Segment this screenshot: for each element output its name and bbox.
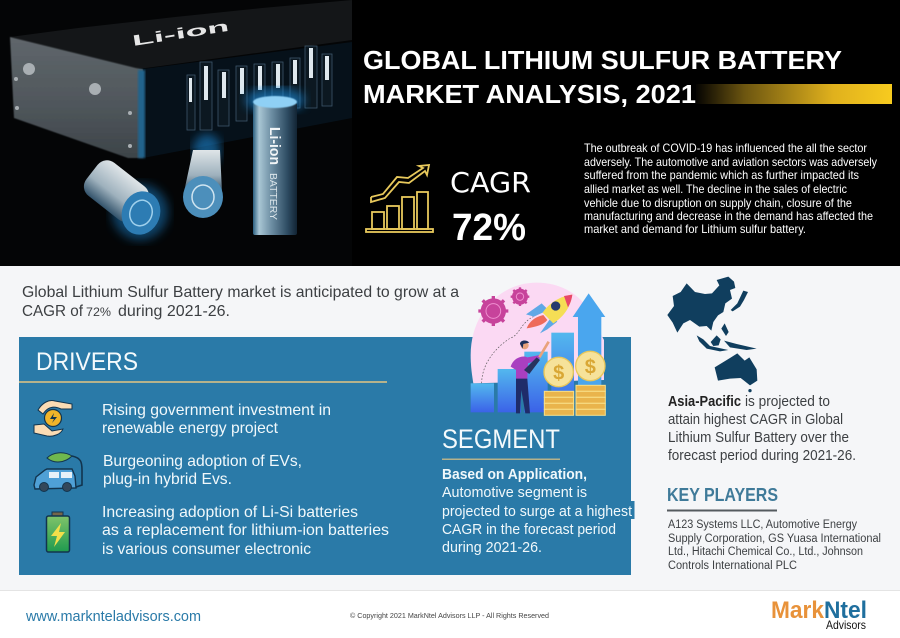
driver 3 text: as a replacement for lithium-ion batteries	[102, 522, 389, 539]
title: MARKET ANALYSIS, 2021	[363, 79, 696, 109]
CAGR value: 72%	[452, 207, 526, 249]
patch behind overflowing word	[630, 501, 634, 519]
bars	[471, 383, 494, 412]
gears	[478, 287, 529, 326]
pink backdrop	[471, 283, 604, 383]
battery pack top	[10, 0, 352, 68]
coins: $	[585, 356, 596, 378]
Asia-Pacific text: attain highest CAGR in Global	[668, 412, 843, 428]
intro text: 72%	[86, 305, 111, 319]
coins	[544, 351, 605, 387]
icon: growth chart	[366, 165, 433, 232]
title	[363, 45, 842, 109]
key players list: Controls International PLC	[668, 560, 797, 572]
key players underline	[667, 510, 777, 512]
terminal bolts	[14, 63, 132, 148]
key players list: A123 Systems LLC, Automotive Energy	[668, 519, 857, 531]
key players list: Ltd., Hitachi Chemical Co., Ltd., Johnson	[668, 546, 863, 558]
COVID-19 text block: vehicle due to disruption on supply chain, closure of the	[584, 196, 852, 210]
flight path	[482, 317, 533, 383]
intro text: during 2021-26.	[118, 303, 230, 320]
driver 1 text	[102, 402, 331, 437]
COVID-19 text block: manufacturing and decrease in the demand has affected the	[584, 209, 873, 223]
segment text: during 2021-26.	[442, 539, 542, 556]
COVID-19 text block: The outbreak of COVID-19 has influenced the all the sector	[584, 141, 867, 155]
pack label: Li-ion	[131, 18, 230, 50]
segment text	[442, 466, 633, 556]
lying cell left	[79, 155, 166, 240]
segment text: projected to surge at a highest	[442, 503, 633, 520]
driver 2 text	[103, 453, 302, 488]
copyright: © Copyright 2021 MarkNtel Advisors LLP - All Rights Reserved	[350, 611, 549, 620]
arrow	[573, 293, 605, 385]
logo: Advisors	[826, 618, 866, 632]
footer	[0, 590, 900, 638]
icon: charged battery	[46, 512, 70, 552]
driver 3 text: Increasing adoption of Li-Si batteries	[102, 504, 358, 521]
key players list	[668, 519, 881, 572]
lying cell centre	[183, 150, 223, 218]
logo: Mark	[771, 597, 825, 624]
illustration: rocket, growth bars and coins	[471, 283, 605, 415]
website: www.marknteladvisors.com	[25, 608, 201, 625]
driver 1 text: renewable energy project	[102, 420, 279, 437]
drivers underline	[19, 381, 387, 383]
intro text: CAGR of	[22, 303, 84, 320]
key players heading: KEY PLAYERS	[667, 485, 778, 505]
intro text: Global Lithium Sulfur Battery market is anticipated to grow at a	[22, 284, 459, 301]
Asia-Pacific text: is projected to	[745, 394, 830, 410]
photo: lithium-ion battery pack and cells	[0, 0, 352, 266]
header panel	[0, 0, 900, 266]
blue glow	[193, 134, 221, 166]
rocket	[526, 295, 572, 333]
logo	[771, 597, 867, 632]
upright cell: Li-ion	[266, 127, 283, 165]
battery pack front	[143, 42, 352, 158]
COVID-19 text block: market and demand for Lithium sulfur battery.	[584, 222, 806, 236]
Asia-Pacific text: Lithium Sulfur Battery over the	[668, 430, 849, 446]
Asia-Pacific text	[668, 394, 856, 464]
intro text	[22, 284, 459, 320]
COVID-19 text block: suffered from the pandemic which as further impacted its	[584, 168, 859, 182]
coins: $	[553, 362, 564, 384]
coin stacks	[544, 385, 605, 415]
driver 2 text: plug-in hybrid Evs.	[103, 471, 232, 488]
Asia-Pacific text: Asia-Pacific	[668, 394, 741, 410]
drivers heading: DRIVERS	[36, 348, 138, 376]
icon: hands with coin	[34, 400, 72, 436]
Asia-Pacific text: forecast period during 2021-26.	[668, 448, 856, 464]
segment text: CAGR in the forecast period	[442, 521, 616, 538]
icon: electric car with leaf	[34, 453, 82, 492]
figure	[511, 341, 549, 413]
key players list: Supply Corporation, GS Yuasa International	[668, 533, 881, 545]
segment text: Automotive segment is	[442, 484, 587, 501]
segment heading: SEGMENT	[442, 424, 560, 454]
segment text: Based on Application,	[442, 466, 587, 483]
driver 2 text: Burgeoning adoption of EVs,	[103, 453, 302, 470]
driver 1 text: Rising government investment in	[102, 402, 331, 419]
upright cell: BATTERY	[267, 173, 278, 220]
logo: Ntel	[824, 597, 867, 624]
segment underline	[442, 458, 560, 460]
panel: drivers and segment	[19, 337, 634, 575]
driver 3 text	[102, 504, 389, 558]
battery pack side	[10, 37, 143, 158]
CAGR label: CAGR	[450, 166, 531, 199]
gold title bar	[696, 84, 892, 104]
COVID-19 text block: allied market as well. The decline in the sales of electric	[584, 182, 847, 196]
driver 3 text: is various consumer electronic	[102, 541, 311, 558]
row of cells	[187, 46, 332, 130]
upright cell	[253, 96, 297, 235]
COVID-19 text block	[584, 141, 877, 236]
title: GLOBAL LITHIUM SULFUR BATTERY	[363, 45, 842, 75]
icon: Asia-Pacific map	[667, 277, 757, 392]
